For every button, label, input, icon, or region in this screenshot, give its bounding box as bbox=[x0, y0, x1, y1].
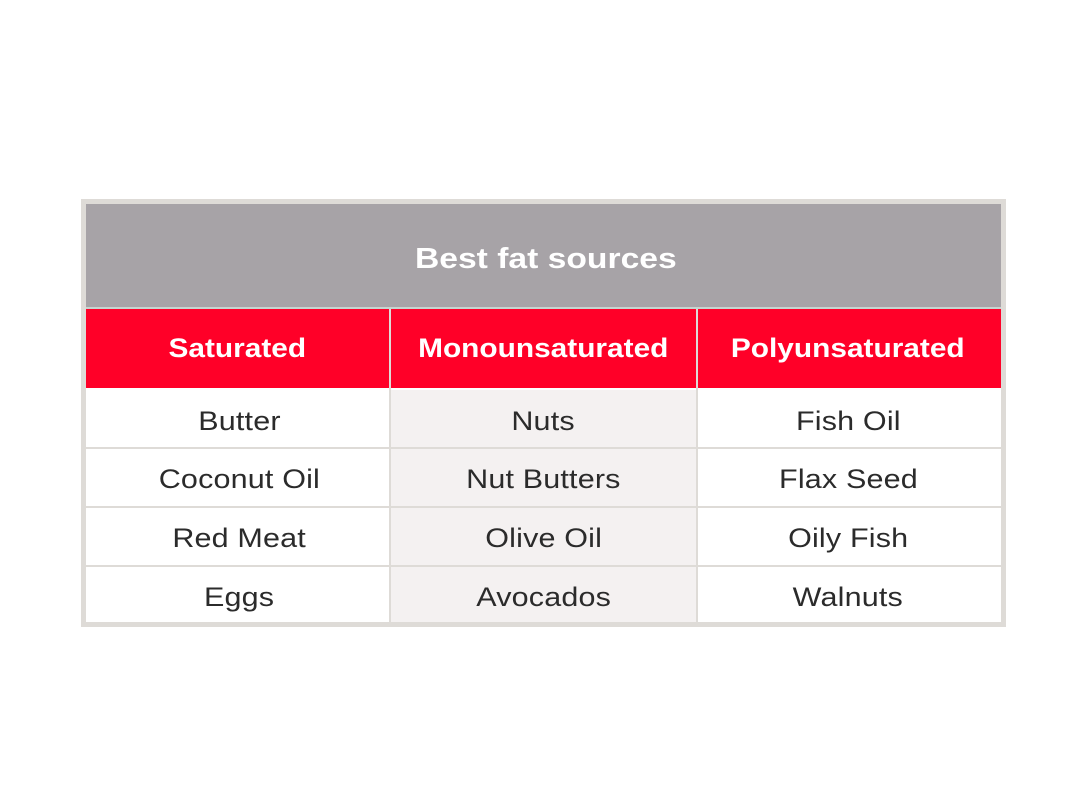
heading: Best fat sources: Best fat sources bbox=[415, 242, 676, 274]
column header: Polyunsaturated bbox=[698, 309, 1001, 388]
cell: Walnuts: Walnuts bbox=[793, 582, 903, 612]
column header: Monounsaturated bbox=[391, 309, 696, 388]
cell: Fish Oil: Fish Oil bbox=[796, 406, 900, 436]
cell: Oily Fish: Oily Fish bbox=[788, 523, 908, 553]
column header: Saturated: Saturated bbox=[169, 333, 306, 363]
row divider 2 bbox=[86, 506, 1001, 508]
header divider bbox=[86, 307, 1001, 309]
table inner area bbox=[86, 204, 1001, 622]
cell: Butter: Butter bbox=[198, 406, 280, 436]
column divider left bbox=[389, 309, 391, 622]
row divider 3 bbox=[86, 565, 1001, 567]
column header: Saturated bbox=[86, 309, 389, 388]
cell: Coconut Oil: Coconut Oil bbox=[158, 464, 320, 494]
cell: Red Meat: Red Meat bbox=[172, 523, 306, 553]
cell: Eggs: Eggs bbox=[204, 582, 274, 612]
column header: Polyunsaturated: Polyunsaturated bbox=[731, 333, 965, 363]
cell: Nuts: Nuts bbox=[512, 406, 575, 436]
row divider 1 bbox=[86, 447, 1001, 449]
monounsaturated column background bbox=[391, 390, 696, 622]
cell: Flax Seed: Flax Seed bbox=[779, 464, 917, 494]
column header: Monounsaturated: Monounsaturated bbox=[418, 333, 669, 363]
cell: Avocados: Avocados bbox=[476, 582, 611, 612]
heading: Best fat sources bbox=[86, 204, 1001, 307]
column divider right bbox=[696, 309, 698, 622]
table: best fat sources bbox=[81, 199, 1006, 627]
cell: Nut Butters: Nut Butters bbox=[466, 464, 621, 494]
cell: Olive Oil: Olive Oil bbox=[485, 523, 602, 553]
